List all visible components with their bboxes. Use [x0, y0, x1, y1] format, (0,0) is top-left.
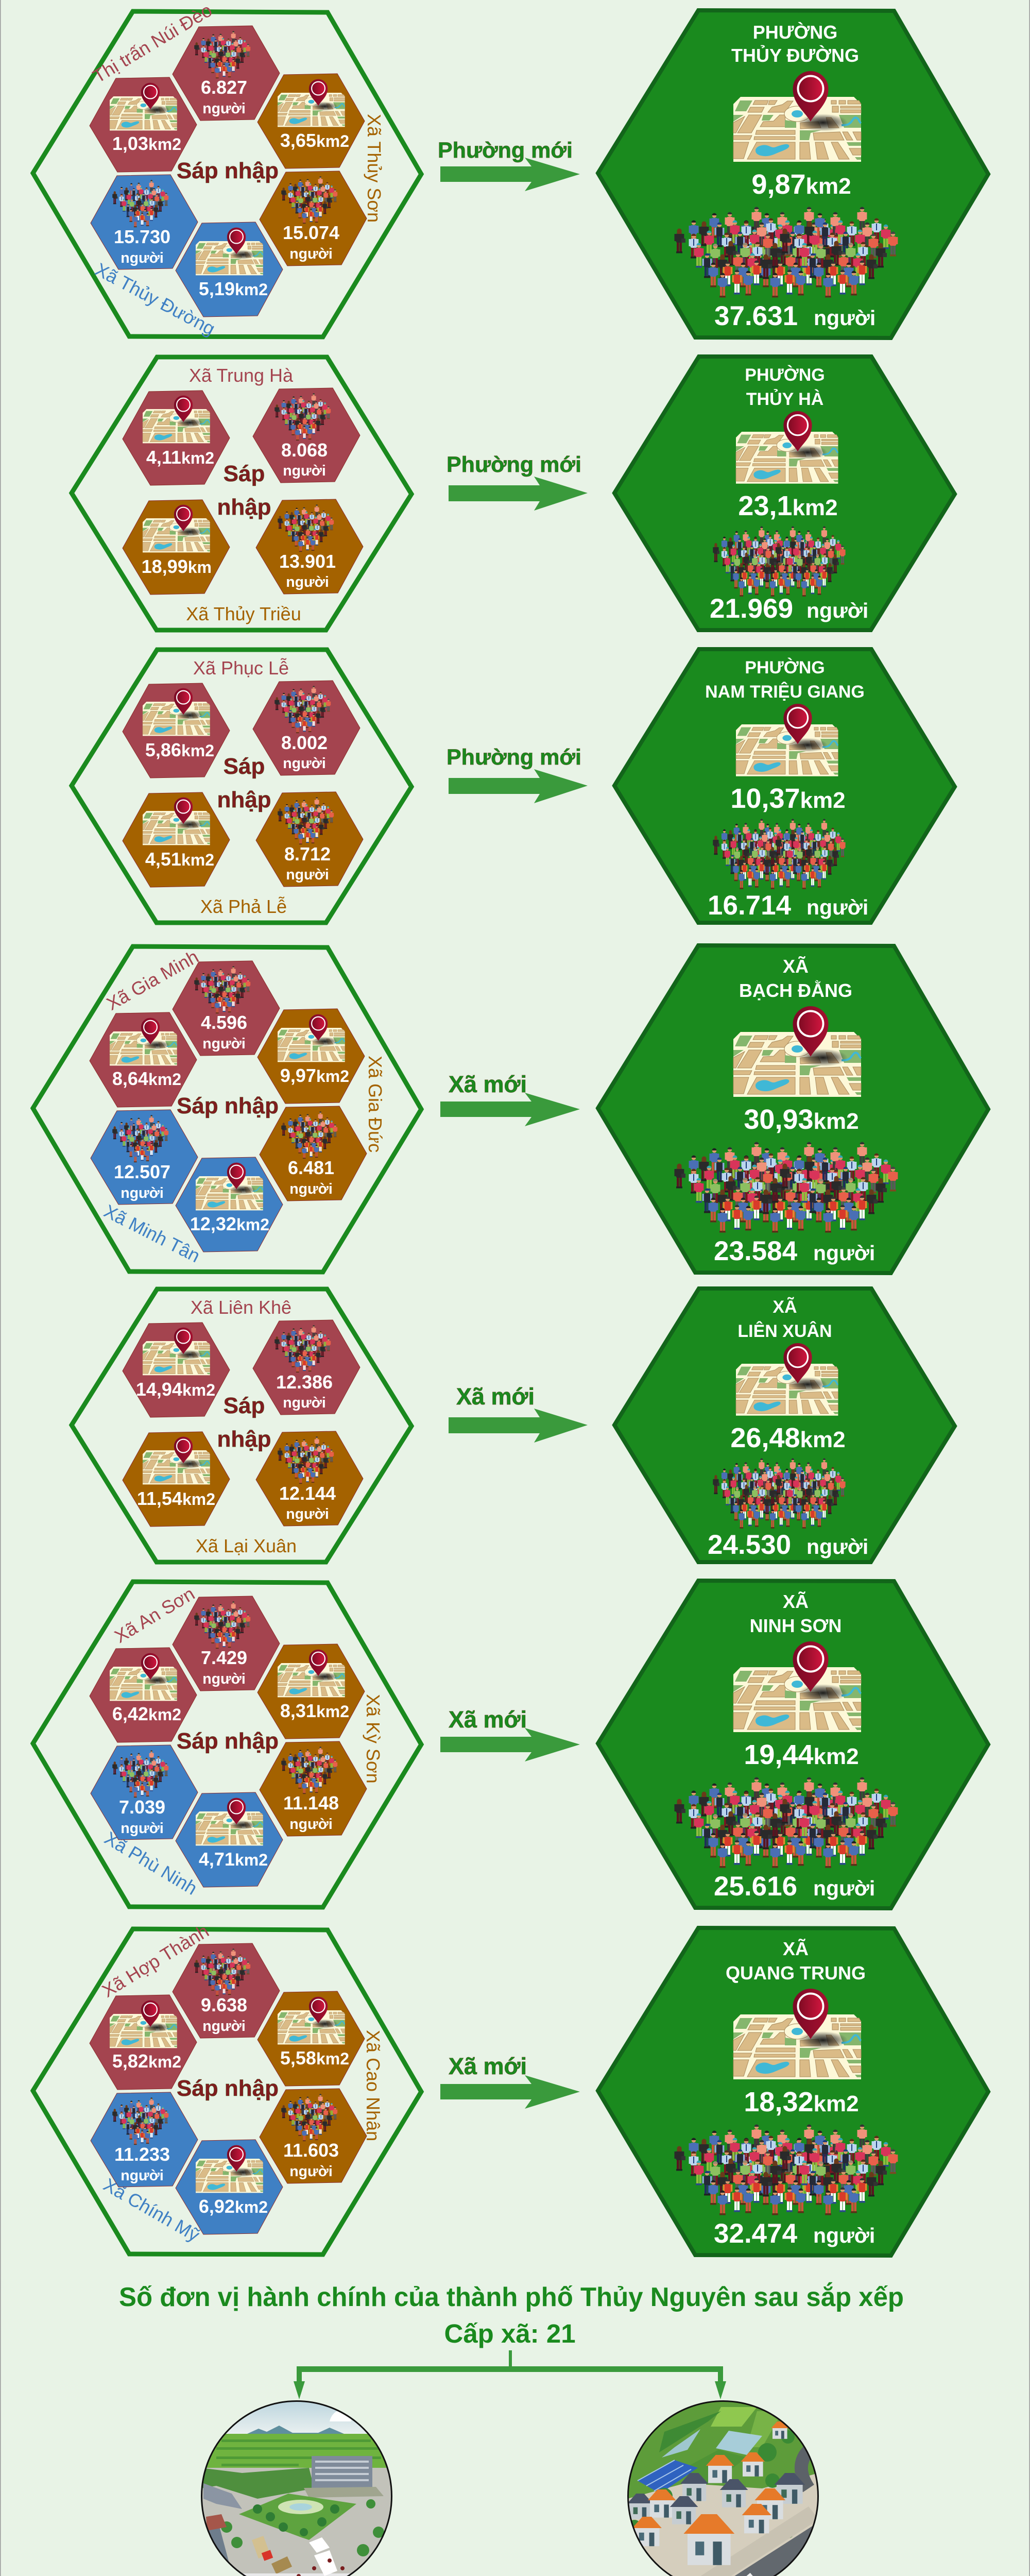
- hex: population Thủy Sơn: [260, 171, 367, 266]
- population: người: [813, 2224, 875, 2247]
- hex: area Hợp Thành: [90, 1995, 197, 2090]
- hex: population Cao Nhân: 11.603: [283, 2140, 339, 2161]
- commune name: BẠCH ĐẰNG: [739, 980, 852, 1001]
- merger row 3: Phường Nam Triệu Giang: [72, 649, 955, 923]
- area: 10,37km2: [730, 783, 846, 814]
- panel: source communes: [33, 1582, 421, 1907]
- population: 24.530: [708, 1530, 791, 1560]
- icon: crowd: [675, 1142, 898, 1232]
- hex: population Chính Mỹ: 11.233: [114, 2144, 170, 2165]
- merger row 1: Phường Thủy Đường: [33, 0, 988, 340]
- merger row 5: Xã Liên Xuân: [72, 1289, 955, 1562]
- hex: area Gia Đức: 9,97km2: [280, 1065, 349, 1086]
- population: người: [814, 306, 876, 330]
- commune name: NINH SƠN: [750, 1615, 842, 1636]
- hex: area Trung Hà: [123, 391, 230, 485]
- hex: population An Sơn: [173, 1596, 280, 1691]
- hex: population Phục Lễ: [253, 681, 360, 775]
- ward name: PHƯỜNG: [745, 365, 825, 385]
- hex: population Chính Mỹ: người: [121, 2167, 164, 2184]
- icon: crowd: [675, 1777, 898, 1868]
- hex: area Cao Nhân: [258, 1991, 365, 2086]
- hex: area Lại Xuân: [123, 1432, 230, 1527]
- hex: area Gia Minh: [90, 1012, 197, 1107]
- arrow: [440, 158, 580, 191]
- panel: source communes: [72, 357, 411, 630]
- hex: population Minh Tân: người: [121, 1185, 164, 1201]
- merger row 2: Phường Thủy Hà: [72, 357, 955, 630]
- arrow: [449, 769, 588, 803]
- hex: area Gia Minh: 8,64km2: [112, 1068, 181, 1089]
- hex: population Lại Xuân: 12.144: [279, 1483, 336, 1504]
- icon: map: [733, 1006, 861, 1097]
- hex: population Liên Khê: người: [283, 1395, 326, 1411]
- hex: area Thủy Triều: 18,99km: [142, 556, 212, 577]
- label: Xã Kỳ Sơn: Xã Kỳ Sơn: [363, 1694, 384, 1784]
- hex: area Minh Tân: 12,32km2: [190, 1213, 269, 1234]
- hex: area Núi Đèo: [90, 77, 197, 172]
- hex: area Phục Lễ: 5,86km2: [145, 739, 214, 760]
- heading: Sáp nhập: Sáp: [224, 1393, 265, 1418]
- commune name: XÃ: [783, 1590, 809, 1612]
- hex: population Thủy Đường: [91, 175, 198, 269]
- hex: population Thủy Đường: 15.730: [114, 226, 170, 247]
- area: 18,32km2: [744, 2087, 859, 2117]
- commune name: QUANG TRUNG: [726, 1962, 866, 1984]
- hex: area An Sơn: 6,42km2: [112, 1703, 181, 1724]
- panel: source communes: [72, 1289, 411, 1562]
- label: Xã Gia Minh: Xã Gia Minh: [103, 946, 202, 1014]
- label: Xã Thủy Đường: Xã Thủy Đường: [92, 259, 219, 340]
- panel: new ward: [598, 10, 988, 338]
- area: 9,87km2: [751, 169, 851, 200]
- population: người: [806, 895, 868, 919]
- hex: area Thủy Sơn: 3,65km2: [280, 130, 349, 151]
- commune name: XÃ: [772, 1297, 797, 1317]
- branching arrows: [294, 2350, 726, 2399]
- icon: crowd: [713, 819, 846, 889]
- hex: population Kỳ Sơn: 11.148: [283, 1792, 339, 1814]
- hex: population Liên Khê: [253, 1320, 360, 1415]
- hex: population Thủy Triều: [256, 499, 363, 594]
- heading: Sáp nhập: nhập: [217, 495, 271, 520]
- label: Xã Chính Mỹ: Xã Chính Mỹ: [100, 2174, 203, 2246]
- hex: area An Sơn: [90, 1648, 197, 1742]
- heading: Sáp nhập: Sáp nhập: [177, 1093, 279, 1118]
- hex: area Kỳ Sơn: [258, 1644, 365, 1739]
- hex: area Liên Khê: [123, 1323, 230, 1417]
- label: Xã Thủy Sơn: Xã Thủy Sơn: [364, 114, 385, 223]
- hex: area Thủy Triều: [123, 500, 230, 595]
- icon: map: [736, 704, 838, 776]
- panel: new ward: [614, 357, 955, 630]
- hex: population Phù Ninh: người: [121, 1820, 164, 1837]
- hex: area Chính Mỹ: [176, 2140, 283, 2234]
- hex: area Thủy Sơn: [258, 74, 365, 168]
- commune name: LIÊN XUÂN: [737, 1321, 832, 1341]
- panel: source communes: [33, 1920, 421, 2255]
- hex: population An Sơn: người: [202, 1671, 246, 1687]
- area: 26,48km2: [730, 1422, 846, 1453]
- hex: population Thủy Triều: 13.901: [279, 551, 336, 572]
- population: người: [813, 1241, 875, 1265]
- area: 30,93km2: [744, 1104, 859, 1135]
- ward name: NAM TRIỆU GIANG: [705, 682, 865, 702]
- hex: population Thủy Sơn: 15.074: [283, 222, 339, 243]
- population: 16.714: [708, 890, 792, 921]
- icon: crowd: [675, 207, 898, 298]
- panel: source communes: [33, 0, 421, 340]
- arrow label: Xã mới: [449, 1706, 527, 1733]
- merger row 4: Xã Bạch Đằng: [33, 945, 988, 1273]
- heading: Sáp nhập: Sáp: [224, 754, 265, 779]
- heading: Sáp nhập: Sáp nhập: [177, 2076, 279, 2101]
- hex: population Thủy Đường: người: [121, 250, 164, 266]
- ward name: PHƯỜNG: [753, 21, 837, 43]
- hex: population Núi Đèo: [173, 26, 280, 121]
- hex: area Phù Ninh: [176, 1792, 283, 1887]
- hex: area Thủy Đường: 5,19km2: [199, 278, 268, 299]
- hex: area Cao Nhân: 5,58km2: [280, 2047, 349, 2069]
- label: Xã Lại Xuân: Xã Lại Xuân: [196, 1535, 297, 1556]
- icon: map: [733, 1989, 861, 2079]
- label: Xã Gia Đức: Xã Gia Đức: [365, 1056, 386, 1153]
- hex: population Phả Lễ: 8.712: [284, 843, 331, 865]
- hex: population Minh Tân: [91, 1110, 198, 1205]
- hex: population Phù Ninh: 7.039: [119, 1797, 165, 1818]
- label: Xã Thủy Triều: Xã Thủy Triều: [186, 603, 301, 624]
- hex: population Lại Xuân: người: [286, 1506, 329, 1522]
- hex: population Phục Lễ: người: [283, 755, 326, 772]
- label: Xã Cao Nhân: Xã Cao Nhân: [363, 2030, 384, 2141]
- hex: population Gia Minh: [173, 961, 280, 1056]
- population: 25.616: [714, 1871, 797, 1902]
- panel: new commune: [598, 1928, 988, 2256]
- hex: population Kỳ Sơn: [260, 1741, 367, 1836]
- label: Xã An Sơn: Xã An Sơn: [111, 1583, 198, 1647]
- merger row 7: Xã Quang Trung: [33, 1920, 988, 2256]
- hex: population Gia Minh: người: [202, 1036, 246, 1052]
- hex: area Minh Tân: [176, 1157, 283, 1252]
- hex: population Trung Hà: 8.068: [281, 439, 328, 461]
- hex: population Phả Lễ: [256, 792, 363, 887]
- hex: area Phù Ninh: 4,71km2: [199, 1849, 268, 1870]
- label: Thị trấn Núi Đèo: Thị trấn Núi Đèo: [89, 0, 216, 87]
- icon: crowd: [675, 2125, 898, 2215]
- arrow: [449, 477, 588, 511]
- hex: population Trung Hà: người: [283, 463, 326, 479]
- hex: area Phục Lễ: [123, 683, 230, 778]
- hex: area Kỳ Sơn: 8,31km2: [280, 1700, 349, 1721]
- icon: map: [733, 1641, 861, 1732]
- heading: Sáp nhập: Sáp: [224, 461, 265, 486]
- panel: new commune: [598, 1581, 988, 1908]
- panel: new commune: [614, 1289, 955, 1562]
- hex: population Liên Khê: 12.386: [276, 1371, 333, 1393]
- ward name: PHƯỜNG: [745, 658, 825, 677]
- hex: population Kỳ Sơn: người: [289, 1816, 333, 1833]
- label: Xã Phả Lễ: Xã Phả Lễ: [200, 896, 287, 917]
- panel: new ward: [614, 649, 955, 923]
- ward name: THỦY ĐƯỜNG: [731, 44, 859, 66]
- arrow: [440, 1728, 580, 1761]
- population: người: [806, 1535, 868, 1558]
- hex: population Phả Lễ: người: [286, 867, 329, 883]
- label: Xã Phù Ninh: Xã Phù Ninh: [101, 1827, 201, 1899]
- label: Xã Minh Tân: Xã Minh Tân: [100, 1200, 203, 1266]
- population: 21.969: [710, 594, 793, 624]
- hex: area Trung Hà: 4,11km2: [146, 447, 214, 468]
- hex: population Phục Lễ: 8.002: [281, 732, 328, 753]
- heading: Sáp nhập: Sáp nhập: [177, 1728, 279, 1754]
- hex: population Núi Đèo: người: [202, 100, 246, 117]
- icon: crowd: [713, 526, 846, 597]
- heading: Sáp nhập: nhập: [217, 787, 271, 812]
- hex: population Gia Đức: [260, 1106, 367, 1201]
- circle image: commune scene: [627, 2401, 829, 2576]
- hex: population An Sơn: 7.429: [201, 1647, 247, 1668]
- label: Xã Phục Lễ: Xã Phục Lễ: [193, 657, 289, 679]
- arrow label: Xã mới: [449, 1071, 527, 1097]
- hex: area Phả Lễ: 4,51km2: [145, 849, 214, 870]
- arrow: [440, 2075, 580, 2109]
- heading: Sáp nhập: nhập: [217, 1427, 271, 1452]
- population: người: [813, 1876, 875, 1900]
- heading: Sáp nhập: Sáp nhập: [177, 158, 279, 183]
- hex: population Hợp Thành: 9.638: [201, 1994, 247, 2015]
- hex: area Lại Xuân: 11,54km2: [137, 1488, 215, 1509]
- hex: area Phả Lễ: [123, 792, 230, 887]
- hex: population Cao Nhân: người: [289, 2163, 333, 2180]
- label: Xã Hợp Thành: Xã Hợp Thành: [98, 1920, 213, 2002]
- hex: area Núi Đèo: 1,03km2: [112, 133, 181, 154]
- hex: population Chính Mỹ: [91, 2092, 198, 2187]
- hex: population Núi Đèo: 6.827: [201, 77, 247, 98]
- hex: population Hợp Thành: người: [202, 2018, 246, 2035]
- label: Xã Trung Hà: Xã Trung Hà: [189, 365, 294, 386]
- population: người: [806, 599, 868, 622]
- summary subheading: Cấp xã: 21: [444, 2319, 576, 2348]
- hex: area Hợp Thành: 5,82km2: [112, 2050, 181, 2072]
- hex: population Gia Đức: 6.481: [288, 1157, 334, 1178]
- population: 32.474: [714, 2218, 798, 2249]
- area: 23,1km2: [738, 490, 838, 521]
- arrow label: Phường mới: [447, 452, 581, 477]
- icon: map: [736, 411, 838, 484]
- arrow label: Xã mới: [449, 2053, 527, 2079]
- arrow: [449, 1409, 588, 1443]
- circle image: ward scene: [201, 2401, 392, 2576]
- panel: new commune: [598, 945, 988, 1273]
- hex: population Thủy Triều: người: [286, 574, 329, 590]
- hex: population Minh Tân: 12.507: [114, 1161, 170, 1182]
- hex: population Lại Xuân: [256, 1431, 363, 1526]
- hex: area Thủy Đường: [176, 222, 283, 317]
- hex: area Liên Khê: 14,94km2: [136, 1379, 215, 1400]
- icon: crowd: [713, 1458, 846, 1529]
- population: 37.631: [714, 301, 798, 331]
- arrow: [440, 1093, 580, 1126]
- ward name: THỦY HÀ: [746, 389, 823, 409]
- hex: population Gia Minh: 4.596: [201, 1012, 247, 1033]
- commune name: XÃ: [783, 955, 809, 977]
- area: 19,44km2: [744, 1739, 859, 1770]
- icon: map: [733, 71, 861, 162]
- commune name: XÃ: [783, 1938, 809, 1959]
- panel: source communes: [72, 650, 411, 923]
- hex: area Chính Mỹ: 6,92km2: [199, 2196, 268, 2217]
- arrow label: Phường mới: [447, 745, 581, 770]
- label: Xã Liên Khê: Xã Liên Khê: [191, 1297, 291, 1318]
- hex: population Cao Nhân: [260, 2089, 367, 2183]
- hex: population Gia Đức: người: [289, 1181, 333, 1197]
- population: 23.584: [714, 1236, 798, 1266]
- hex: population Trung Hà: [253, 388, 360, 483]
- hex: population Phù Ninh: [91, 1745, 198, 1840]
- summary heading: Số đơn vị hành chính của thành phố Thủy Nguyên sau sắp xếp: [119, 2282, 904, 2312]
- hex: population Thủy Sơn: người: [289, 246, 333, 262]
- panel: source communes: [33, 946, 421, 1272]
- arrow label: Phường mới: [438, 138, 573, 163]
- hex: area Gia Đức: [258, 1009, 365, 1104]
- icon: map: [736, 1343, 838, 1416]
- merger row 6: Xã Ninh Sơn: [33, 1581, 988, 1908]
- hex: population Hợp Thành: [173, 1943, 280, 2038]
- arrow label: Xã mới: [456, 1383, 535, 1410]
